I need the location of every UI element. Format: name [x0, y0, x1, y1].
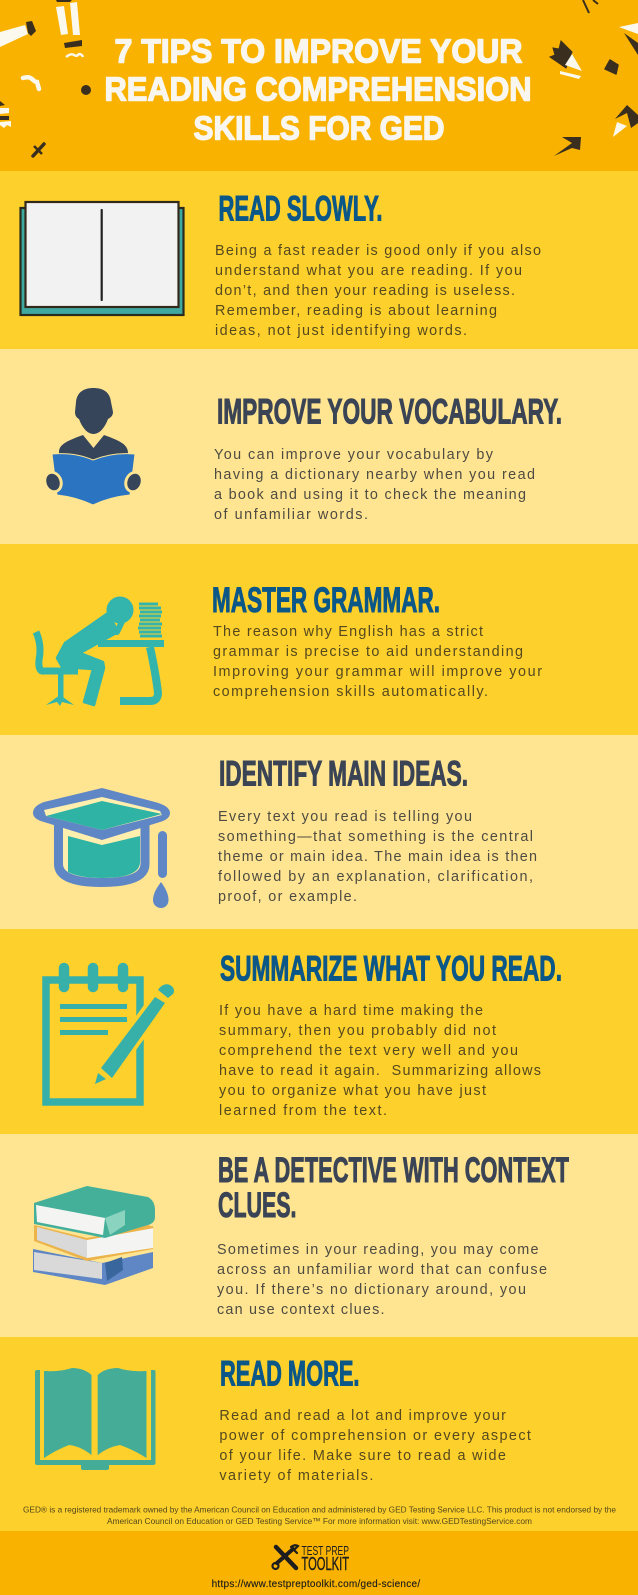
text block: comprehension skills automatically.: [213, 684, 488, 700]
text block: Remember, reading is about learning: [215, 303, 497, 319]
text block: understand what you are reading. If you: [215, 263, 522, 279]
icon: stack of books: [33, 1186, 155, 1285]
text block: power of comprehension or every aspect: [219, 1428, 531, 1444]
text block: ideas, not just identifying words.: [215, 323, 467, 339]
text block: have to read it again. Summarizing allows: [219, 1063, 541, 1079]
panel: read slowly: [0, 171, 638, 349]
text block: you. If there’s no dictionary around, you: [217, 1282, 526, 1298]
text block: [217, 1242, 547, 1318]
text block: Read and read a lot and improve your: [219, 1408, 506, 1424]
text block: of your life. Make sure to read a wide: [219, 1448, 506, 1464]
text block: you to organize what you have just: [219, 1083, 486, 1099]
panel: read more: [0, 1337, 638, 1531]
text block: comprehend the text very well and you: [219, 1043, 518, 1059]
disclaimer note: [23, 1504, 616, 1526]
heading: MASTER GRAMMAR.: [212, 581, 440, 620]
text block: [219, 1003, 541, 1119]
text block: don’t, and then your reading is useless.: [215, 283, 515, 299]
heading: CLUES.: [218, 1186, 296, 1225]
text block: Improving your grammar will improve your: [213, 664, 542, 680]
icon: closed-page book: [20, 202, 184, 315]
text block: theme or main idea. The main idea is then: [218, 849, 537, 865]
icon: notepad and pencil: [46, 968, 174, 1102]
title: SKILLS FOR GED: [194, 110, 444, 146]
text block: followed by an explanation, clarification,: [218, 869, 533, 885]
logo text: TEST PREP: [302, 1543, 349, 1558]
heading: READ MORE.: [220, 1354, 360, 1394]
disclaimer note: American Council on Education or GED Testing Service™ For more information visit: www.GEDTestingService.com: [107, 1516, 532, 1526]
url: https://www.testpreptoolkit.com/ged-science/: [212, 1579, 420, 1590]
icon: person reading: [41, 388, 146, 505]
title: [104, 32, 532, 146]
text block: [219, 1408, 531, 1484]
text block: Sometimes in your reading, you may come: [217, 1242, 538, 1258]
disclaimer note: GED® is a registered trademark owned by the American Council on Education and administered by GED Testing Service LLC. This product is not endorsed by the: [23, 1504, 616, 1514]
text block: across an unfamiliar word that can confuse: [217, 1262, 547, 1278]
text block: having a dictionary nearby when you read: [214, 467, 535, 483]
text block: [214, 447, 535, 523]
panel: header: [0, 0, 638, 171]
text block: Being a fast reader is good only if you also: [215, 243, 541, 259]
icon: right scattered brush marks: [550, 0, 638, 156]
panel: master grammar: [0, 544, 638, 735]
heading: IDENTIFY MAIN IDEAS.: [219, 754, 468, 794]
text block: The reason why English has a strict: [213, 624, 483, 640]
logo text: TOOLKIT: [302, 1554, 349, 1574]
text block: learned from the text.: [219, 1103, 387, 1119]
heading: [218, 1151, 569, 1225]
text block: grammar is precise to aid understanding: [213, 644, 523, 660]
icon: open book: [35, 1368, 156, 1470]
text block: a book and using it to check the meaning: [214, 487, 526, 503]
text block: If you have a hard time making the: [219, 1003, 483, 1019]
text block: [218, 809, 537, 905]
text block: of unfamiliar words.: [214, 507, 368, 523]
icon: crossed wrench and screwdriver: [272, 1545, 298, 1569]
panel: identify main ideas: [0, 735, 638, 929]
icon: left scattered brush marks: [0, 0, 91, 156]
text block: can use context clues.: [217, 1302, 384, 1318]
panel: be a detective: [0, 1134, 638, 1337]
icon: graduation cap: [33, 788, 170, 908]
text block: [215, 243, 541, 339]
heading: READ SLOWLY.: [218, 190, 382, 228]
panel: improve your vocabulary: [0, 349, 638, 544]
panel: summarize what you read: [0, 929, 638, 1134]
logo text: [302, 1543, 349, 1574]
text block: something—that something is the central: [218, 829, 533, 845]
title: READING COMPREHENSION: [104, 70, 532, 108]
text block: summary, then you probably did not: [219, 1023, 496, 1039]
text block: You can improve your vocabulary by: [214, 447, 494, 463]
panel: footer: [0, 1531, 638, 1595]
text block: Every text you read is telling you: [218, 809, 472, 825]
text block: variety of materials.: [219, 1468, 373, 1484]
text block: proof, or example.: [218, 889, 357, 905]
title: 7 TIPS TO IMPROVE YOUR: [114, 32, 523, 70]
icon: student slumped at desk: [36, 596, 164, 706]
text block: [213, 624, 542, 700]
